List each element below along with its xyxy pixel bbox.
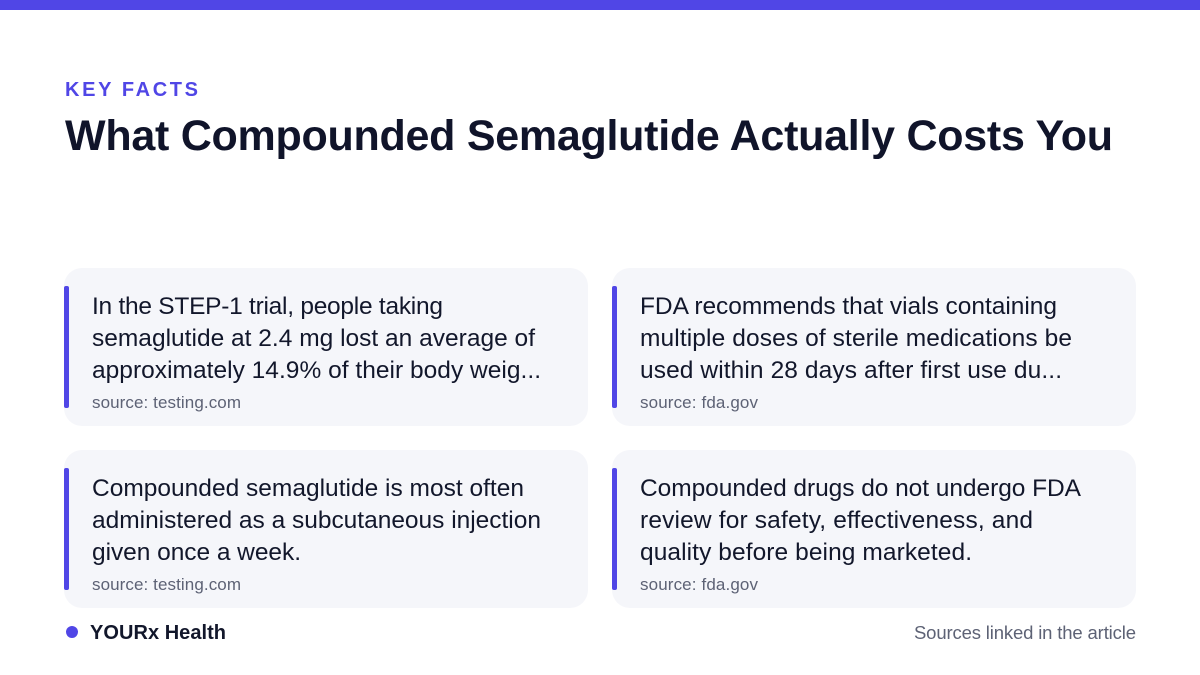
- panel: fact card top left: semaglutide at 2.4 mg lost an average of: [92, 325, 535, 352]
- panel: fact card bottom right: Compounded drugs do not undergo FDA: [640, 475, 1082, 502]
- panel: fact card top left: approximately 14.9% of their body weig...: [92, 357, 541, 384]
- panel: fact card top right: source: fda.gov: [640, 393, 758, 412]
- panel: fact card top left: source: testing.com: [92, 393, 241, 412]
- panel: fact card bottom left: [64, 450, 588, 608]
- panel: fact card top right: multiple doses of sterile medications be: [640, 325, 1072, 352]
- panel: fact card top right: used within 28 days after first use du...: [640, 357, 1062, 384]
- panel: fact card bottom right: [612, 450, 1136, 608]
- panel: fact card top right: FDA recommends that vials containing: [640, 293, 1057, 320]
- panel: fact card top left: [64, 268, 588, 426]
- panel: fact card bottom left: given once a week.: [92, 539, 301, 566]
- panel: fact card bottom left: Compounded semaglutide is most often: [92, 475, 524, 502]
- top accent bar: [0, 0, 1200, 10]
- panel: fact card bottom right: quality before being marketed.: [640, 539, 972, 566]
- title: What Compounded Semaglutide Actually Costs You: [65, 112, 1113, 160]
- panel: fact card top left: In the STEP-1 trial, people taking: [92, 293, 443, 320]
- brand name: YOURx Health: [90, 622, 226, 644]
- icon: brand dot: [66, 626, 78, 638]
- panel: fact card bottom right: source: fda.gov: [640, 575, 758, 594]
- panel: fact card bottom right: review for safety, effectiveness, and: [640, 507, 1033, 534]
- footer note: Sources linked in the article: [914, 622, 1136, 643]
- panel: fact card bottom left: administered as a subcutaneous injection: [92, 507, 541, 534]
- panel: fact card top right: [612, 268, 1136, 426]
- panel: fact card bottom left: source: testing.com: [92, 575, 241, 594]
- eyebrow label: KEY FACTS: [65, 79, 198, 101]
